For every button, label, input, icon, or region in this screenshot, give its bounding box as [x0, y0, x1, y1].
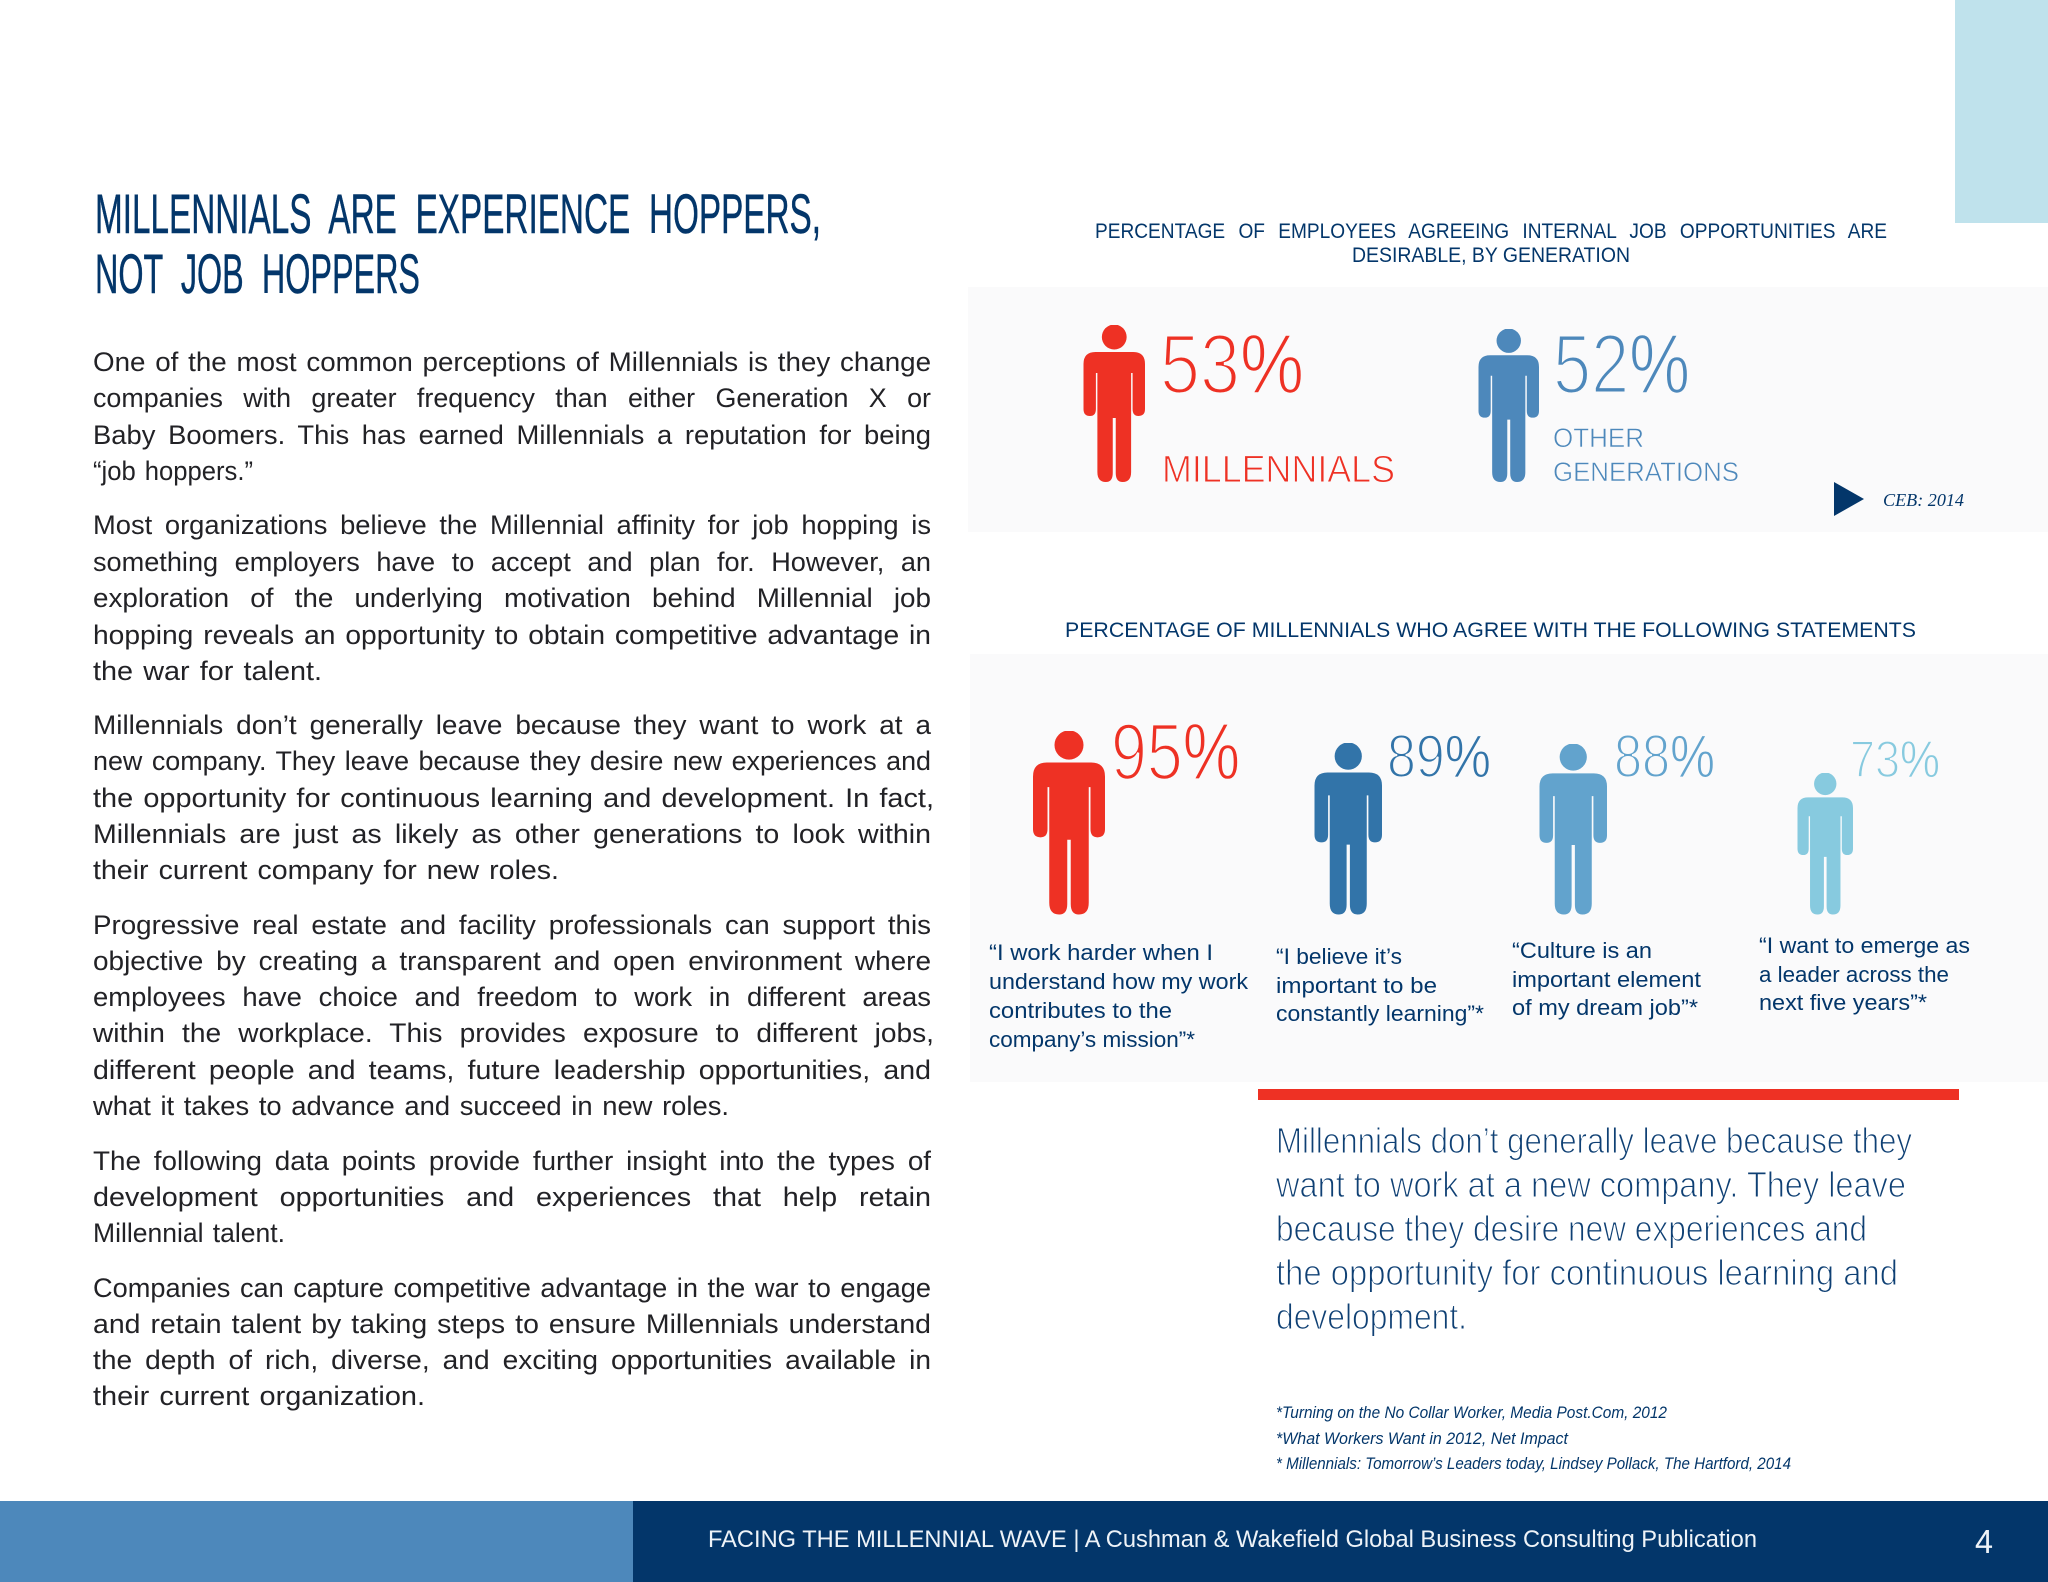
panel: generation comparison	[968, 287, 2048, 532]
paragraph 5: The following data points provide further insight into the types of	[93, 1146, 932, 1176]
footnotes: *Turning on the No Collar Worker, Media Post.Com, 2012	[1276, 1404, 1667, 1422]
heading: internal job opportunities: PERCENTAGE OF EMPLOYEES AGREEING INTERNAL JOB OPPORTUNITIES ARE	[1095, 219, 1887, 243]
icon: source arrow	[1834, 482, 1864, 516]
paragraph 2: the war for talent.	[93, 656, 322, 686]
stat group: 89%: important to be	[1276, 973, 1437, 998]
paragraph 5: Millennial talent.	[93, 1218, 285, 1248]
callout: pull quote	[1275, 1120, 1912, 1337]
stat group: 73%	[1759, 731, 1970, 1015]
paragraph 3	[93, 710, 934, 885]
footnotes	[1276, 1404, 1791, 1473]
stat group: 95%: contributes to the	[989, 998, 1172, 1023]
callout: pull quote: the opportunity for continuous learning and	[1276, 1252, 1898, 1293]
paragraph 2: hopping reveals an opportunity to obtain competitive advantage in	[93, 620, 931, 650]
stat group: 89%: constantly learning”*	[1276, 1001, 1484, 1026]
callout: pull quote: want to work at a new company. They leave	[1275, 1164, 1906, 1205]
paragraph 1: “job hoppers.”	[93, 456, 253, 486]
paragraph 3: Millennials don’t generally leave because they want to work at a	[93, 710, 932, 740]
paragraph 6: their current organization.	[93, 1381, 425, 1411]
title	[95, 182, 821, 305]
callout: pull quote: because they desire new experiences and	[1276, 1208, 1867, 1249]
label: other generations	[1553, 423, 1739, 487]
stat: 52%: 52%	[1553, 317, 1690, 411]
stat group: 73%: a leader across the	[1759, 962, 1949, 987]
label: other generations: OTHER	[1553, 423, 1644, 453]
corner accent block	[1955, 0, 2048, 223]
paragraph 3: Millennials are just as likely as other generations to look within	[93, 819, 931, 849]
footnotes: * Millennials: Tomorrow’s Leaders today, Lindsey Pollack, The Hartford, 2014	[1276, 1455, 1791, 1473]
label: millennials: MILLENNIALS	[1162, 449, 1395, 491]
paragraph 2: something employers have to accept and plan for. However, an	[93, 547, 931, 577]
stat group: 88%: important element	[1512, 967, 1702, 992]
paragraph 2: Most organizations believe the Millennial affinity for job hopping is	[93, 510, 931, 540]
paragraph 1: Baby Boomers. This has earned Millennials a reputation for being	[93, 420, 931, 450]
footer bar	[0, 1501, 2048, 1582]
footer text: FACING THE MILLENNIAL WAVE | A Cushman & Wakefield Global Business Consulting Publication	[708, 1526, 1757, 1553]
callout: pull quote: Millennials don’t generally leave because they	[1276, 1120, 1912, 1161]
stat: 53%: 53%	[1160, 317, 1304, 411]
stat group: 95%: “I work harder when I	[989, 940, 1213, 965]
stat group: 95%: 95%	[1111, 707, 1240, 796]
icon: blue person other generations	[1478, 329, 1539, 482]
title: MILLENNIALS ARE EXPERIENCE HOPPERS,	[95, 182, 821, 245]
panel: millennial statements	[970, 654, 2048, 1082]
body text column	[92, 347, 934, 1411]
stat group: 95%: company’s mission”*	[989, 1027, 1195, 1052]
stat group: 95%	[989, 707, 1249, 1052]
paragraph 3: new company. They leave because they desire new experiences and	[93, 746, 931, 776]
stat group: 73%: 73%	[1850, 731, 1940, 789]
icon: red person millennials	[1084, 324, 1145, 482]
stat group: 89%: 89%	[1387, 723, 1491, 790]
stat group: 73%: next five years”*	[1759, 990, 1927, 1015]
paragraph 4: employees have choice and freedom to work in different areas	[93, 982, 931, 1012]
label: other generations: GENERATIONS	[1553, 457, 1739, 487]
paragraph 1: One of the most common perceptions of Millennials is they change	[93, 347, 931, 377]
heading: internal job opportunities: DESIRABLE, BY GENERATION	[1352, 243, 1630, 267]
paragraph 4	[92, 910, 934, 1121]
paragraph 4: Progressive real estate and facility professionals can support this	[93, 910, 931, 940]
stat group: 73%: “I want to emerge as	[1759, 933, 1970, 958]
paragraph 4: different people and teams, future leadership opportunities, and	[93, 1055, 931, 1085]
paragraph 5: development opportunities and experiences that help retain	[93, 1182, 931, 1212]
paragraph 6	[93, 1273, 931, 1411]
paragraph 4: within the workplace. This provides exposure to different jobs,	[92, 1018, 934, 1048]
stat group: 89%	[1276, 723, 1491, 1026]
source: CEB 2014: CEB: 2014	[1883, 490, 1964, 510]
paragraph 4: what it takes to advance and succeed in new roles.	[92, 1091, 729, 1121]
paragraph 6: and retain talent by taking steps to ensure Millennials understand	[93, 1309, 931, 1339]
paragraph 2	[93, 510, 931, 686]
paragraph 4: objective by creating a transparent and open environment where	[93, 946, 931, 976]
paragraph 1: companies with greater frequency than either Generation X or	[93, 383, 931, 413]
stat group: 95%: understand how my work	[989, 969, 1249, 994]
callout: pull quote: development.	[1276, 1296, 1467, 1337]
paragraph 3: the opportunity for continuous learning and development. In fact,	[93, 783, 934, 813]
paragraph 3: their current company for new roles.	[93, 855, 559, 885]
paragraph 2: exploration of the underlying motivation behind Millennial job	[93, 583, 931, 613]
heading: millennial statements: PERCENTAGE OF MILLENNIALS WHO AGREE WITH THE FOLLOWING STATEMENTS	[1065, 618, 1916, 642]
heading: internal job opportunities	[1095, 219, 1887, 267]
page number: 4	[1975, 1523, 1993, 1560]
stat group: 88%: of my dream job”*	[1512, 995, 1698, 1020]
stat group: 88%	[1512, 723, 1715, 1020]
stat group: 89%: “I believe it’s	[1276, 944, 1402, 969]
paragraph 6: the depth of rich, diverse, and exciting opportunities available in	[93, 1345, 931, 1375]
callout rule	[1258, 1089, 1959, 1100]
footnotes: *What Workers Want in 2012, Net Impact	[1276, 1430, 1569, 1448]
stat group: 88%: “Culture is an	[1512, 938, 1652, 963]
paragraph 6: Companies can capture competitive advantage in the war to engage	[93, 1273, 931, 1303]
paragraph 1	[93, 347, 931, 486]
title: NOT JOB HOPPERS	[95, 242, 420, 305]
paragraph 5	[93, 1146, 932, 1248]
stat group: 88%: 88%	[1614, 723, 1715, 790]
